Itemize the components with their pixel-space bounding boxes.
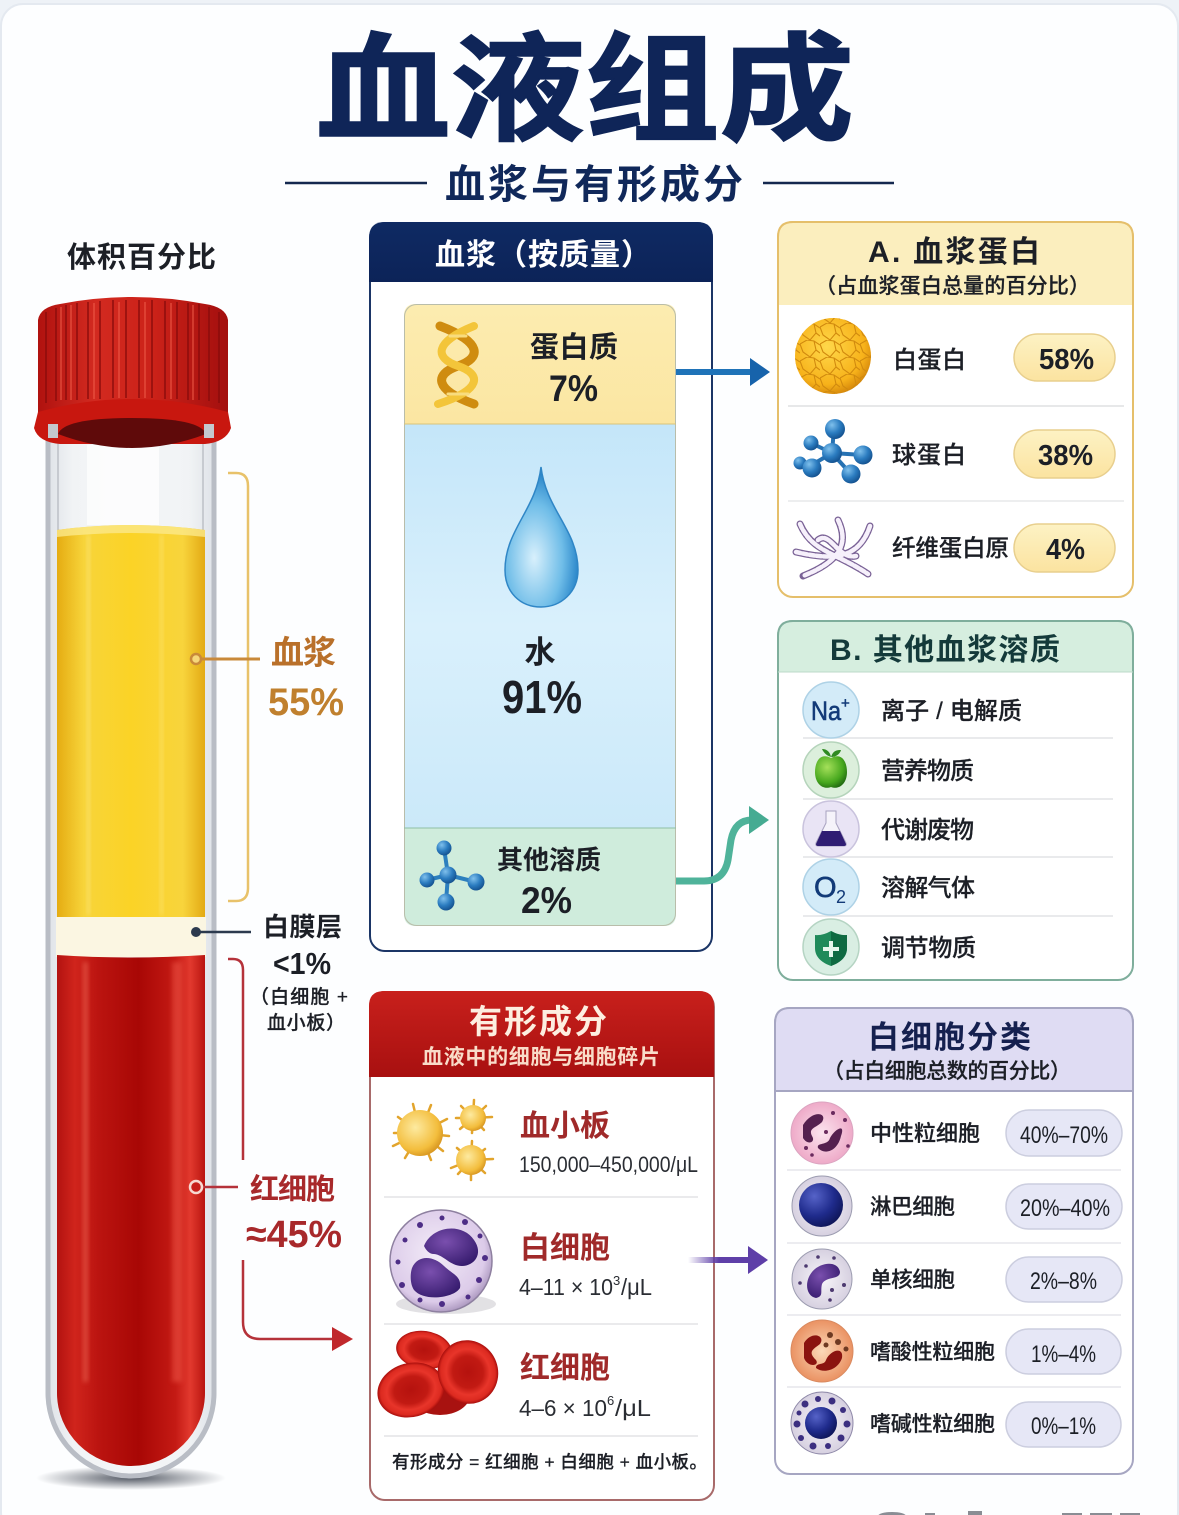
row: lymphocyte [792, 1176, 1122, 1236]
row: ions: 离子 / 电解质 [881, 698, 1022, 725]
row: lymphocyte: 淋巴细胞 [870, 1195, 955, 1219]
callout: buffy coat: 白膜层 [263, 912, 342, 942]
other solutes label [497, 845, 601, 921]
row: dissolved gases: 2 [836, 887, 846, 907]
panel A: plasma proteins: （占血浆蛋白总量的百分比） [815, 275, 1090, 298]
glass body [48, 425, 214, 1476]
panel: plasma by mass [369, 222, 713, 951]
row: white blood cells [390, 1210, 652, 1314]
callout: buffy coat: 血小板） [267, 1012, 345, 1034]
callout: red cells 45% with arrow: 红细胞 [250, 1173, 335, 1206]
other solutes label: 2% [521, 880, 572, 921]
row: red blood cells [371, 1327, 651, 1425]
callout: plasma 55%: 血浆 [271, 634, 336, 671]
row: basophil [791, 1392, 1121, 1454]
formula note: 有形成分 = 红细胞 + 白细胞 + 血小板。 [392, 1452, 707, 1472]
panel B: other plasma solutes: B. 其他血浆溶质 [830, 634, 1060, 667]
row: albumin [795, 318, 1115, 394]
formed elements header: 血液中的细胞与细胞碎片 [422, 1046, 660, 1069]
row: red blood cells: 6 [607, 1393, 614, 1408]
other solutes label: 其他溶质 [497, 845, 601, 875]
row: nutrients: 营养物质 [881, 758, 974, 785]
callout: plasma 55% [191, 473, 344, 901]
row: globulin: 球蛋白 [892, 442, 966, 469]
callout: red cells 45% with arrow: ≈45% [246, 1214, 342, 1256]
row: red blood cells: /μL [615, 1395, 651, 1421]
stacked composition column [404, 304, 676, 926]
row: ions: Na [811, 696, 842, 726]
tube shadow [36, 1466, 226, 1490]
row: globulin: 38% [1038, 440, 1093, 472]
formed elements header [369, 991, 714, 1077]
row: dissolved gases [803, 859, 975, 915]
row: red blood cells: 红细胞 [520, 1352, 610, 1385]
plasma layer [57, 525, 205, 920]
callout: red cells 45% with arrow [190, 959, 353, 1351]
panel B header [778, 621, 1133, 672]
row: dissolved gases: O [814, 872, 837, 904]
callout: buffy coat: （白细胞 + [250, 986, 348, 1008]
buffy coat layer [56, 917, 206, 957]
row: white blood cells: 4–11 × 10 [519, 1274, 613, 1300]
heading: volume percentage: 体积百分比 [67, 241, 216, 274]
plasma header [369, 222, 713, 282]
red cell layer [57, 955, 205, 1466]
protein label [530, 331, 618, 409]
panel A header [778, 222, 1133, 305]
water label: 水 [524, 635, 556, 670]
row: platelets: 150,000–450,000/μL [519, 1152, 698, 1177]
row: monocyte: 单核细胞 [870, 1268, 955, 1292]
row: neutrophil [791, 1102, 1122, 1164]
formed elements header: 有形成分 [469, 1003, 607, 1040]
row: ions [803, 682, 1022, 738]
row: white blood cells: 白细胞 [520, 1232, 610, 1265]
panel: formed elements [369, 991, 714, 1500]
arrow: protein to panel A [676, 358, 770, 386]
title: 血液组成 [316, 25, 854, 157]
row: neutrophil: 40%–70% [1020, 1122, 1108, 1149]
row: eosinophil [791, 1320, 1121, 1382]
row: metabolic waste: 代谢废物 [881, 817, 974, 844]
row: basophil: 嗜碱性粒细胞 [870, 1413, 995, 1436]
panel A: plasma proteins: A. 血浆蛋白 [868, 236, 1040, 269]
row: fibrinogen: 纤维蛋白原 [892, 535, 1009, 561]
row: neutrophil: 中性粒细胞 [870, 1121, 980, 1146]
row: regulators: 调节物质 [881, 935, 976, 962]
row: nutrients [803, 742, 974, 798]
row: white blood cells: /μL [621, 1274, 652, 1300]
row: platelets: 血小板 [520, 1110, 610, 1143]
row: albumin: 58% [1039, 344, 1094, 376]
panel: white cell classification: （占白细胞总数的百分比） [823, 1060, 1071, 1083]
row: monocyte [792, 1249, 1122, 1309]
callout: buffy coat [191, 912, 348, 1034]
row: platelets [393, 1100, 698, 1180]
row: red blood cells: 4–6 × 10 [519, 1395, 607, 1421]
icon: water drop [505, 467, 578, 607]
panel A: plasma proteins [778, 222, 1133, 597]
row: lymphocyte: 20%–40% [1020, 1195, 1110, 1222]
row: white blood cells: 3 [613, 1273, 620, 1288]
panel: plasma by mass: 血浆（按质量） [435, 239, 651, 272]
protein label: 7% [549, 368, 598, 409]
callout: plasma 55%: 55% [268, 681, 344, 724]
row: albumin: 白蛋白 [893, 347, 966, 374]
panel: white cell classification: 白细胞分类 [868, 1020, 1031, 1055]
row: metabolic waste [803, 801, 974, 857]
callout: buffy coat: <1% [273, 946, 331, 981]
row: eosinophil: 嗜酸性粒细胞 [870, 1341, 995, 1364]
row: fibrinogen: 4% [1046, 534, 1085, 566]
row: dissolved gases: 溶解气体 [881, 875, 975, 902]
panel: white cell classification [775, 1008, 1133, 1474]
icon: protein helix [438, 326, 474, 404]
protein label: 蛋白质 [530, 331, 618, 364]
panel B: other plasma solutes [778, 621, 1133, 980]
row: eosinophil: 1%–4% [1031, 1341, 1096, 1368]
classification header [775, 1008, 1133, 1091]
test tube [34, 297, 231, 1490]
water label [502, 635, 582, 723]
subtitle: 血浆与有形成分 [445, 163, 743, 207]
arrow: solutes to panel B [676, 806, 769, 881]
arrow: white cells to classification [688, 1246, 768, 1274]
row: regulators [803, 919, 976, 975]
row: fibrinogen [796, 520, 1115, 576]
watermark fragment [878, 1511, 1140, 1515]
row: ions: + [841, 695, 850, 712]
icon: solute molecule [420, 840, 484, 910]
row: basophil: 0%–1% [1031, 1413, 1096, 1440]
row: monocyte: 2%–8% [1030, 1268, 1097, 1295]
cap [34, 297, 231, 448]
row: globulin [794, 419, 1115, 484]
water label: 91% [502, 671, 582, 723]
